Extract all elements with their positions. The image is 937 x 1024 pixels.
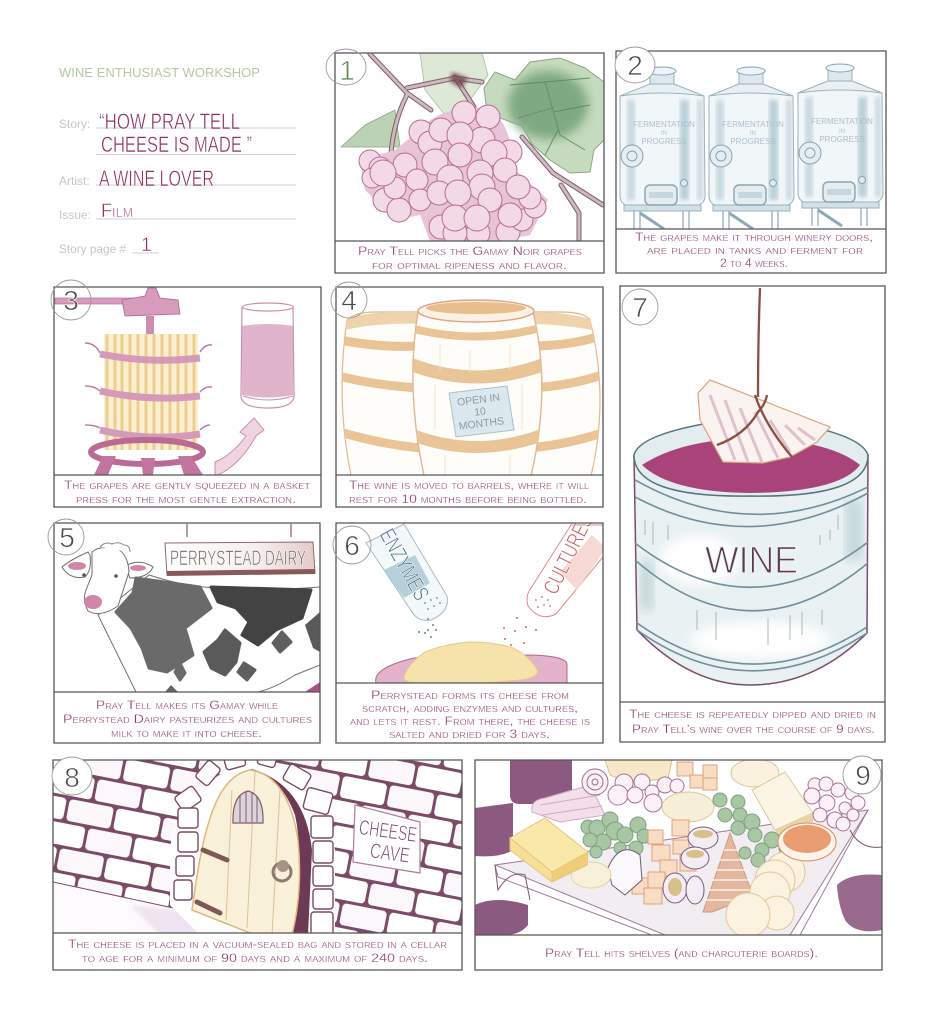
caption: are placed in tanks and ferment for — [647, 243, 863, 257]
walnuts — [571, 862, 611, 888]
illustration: three oak barrels and sign — [338, 300, 605, 480]
story field — [59, 109, 252, 157]
caption: The cheese is repeatedly dipped and dried in — [629, 707, 876, 721]
caption — [358, 244, 582, 272]
frame — [620, 286, 885, 742]
number badge 4: 4 — [341, 285, 357, 316]
caption: Perrystead forms its cheese from — [371, 688, 569, 702]
number badge 5 — [48, 519, 84, 555]
caption — [64, 478, 310, 506]
door shadow — [250, 769, 312, 935]
left barrel — [341, 311, 419, 474]
number badge 9 — [843, 756, 881, 794]
fig halves — [663, 827, 718, 904]
panel 5: dairy cow — [48, 519, 320, 743]
illustration: tub of wine with dipped cheese — [634, 288, 868, 685]
frame — [53, 760, 462, 970]
caption: scratch, adding enzymes and cultures, — [362, 701, 578, 715]
story field: Story: — [59, 117, 90, 131]
door — [192, 770, 300, 935]
story page number field: Story page # — [59, 242, 126, 256]
field lines — [96, 128, 296, 253]
number badge 2: 2 — [627, 50, 643, 81]
green grapes right — [713, 793, 793, 867]
sign: open in 10 months — [449, 386, 514, 437]
cow pink ears, muzzle — [68, 562, 320, 692]
caption: Pray Tell picks the Gamay Noir grapes — [358, 244, 582, 258]
floor — [53, 882, 295, 935]
frame — [336, 523, 603, 743]
caption — [629, 707, 876, 736]
salami roll — [582, 769, 608, 795]
number badge 1: 1 — [339, 55, 355, 86]
bowl back — [376, 655, 567, 683]
artist field: A WINE LOVER — [99, 166, 214, 191]
story field: CHEESE IS MADE ” — [101, 132, 252, 157]
frame — [336, 287, 603, 507]
cow outline — [62, 548, 320, 692]
sign: open in 10 months: 10 — [473, 405, 487, 419]
hanging sign: perrystead dairy — [165, 524, 315, 576]
caption — [349, 478, 590, 506]
number badge 8 — [52, 757, 92, 795]
illustration: three steel tanks: PROGRESS — [819, 135, 865, 144]
illustration: three steel tanks — [620, 64, 883, 229]
issue field — [59, 201, 133, 222]
cheese block — [510, 818, 588, 882]
green grapes left — [581, 812, 651, 858]
pink grapes right — [804, 777, 865, 831]
sign: cheese cave: CHEESE — [358, 816, 418, 847]
cultures shaker: CULTURES — [538, 510, 598, 598]
illustration: charcuterie board and wine — [475, 758, 882, 945]
sign: cheese cave — [353, 805, 420, 873]
caption: The cheese is placed in a vacuum-sealed bag and stored in a cellar — [68, 937, 447, 951]
number badge 7: 7 — [632, 292, 648, 323]
tub rim — [634, 417, 868, 496]
illustration: gamay noir grape cluster and leaves — [341, 53, 604, 245]
frame — [616, 51, 886, 273]
number badge 8: 8 — [64, 762, 80, 793]
number badge 6: 6 — [344, 530, 360, 561]
striped triangle cheese — [703, 833, 755, 912]
round brie — [662, 792, 714, 822]
tub body — [634, 455, 868, 685]
number badge 1 — [326, 49, 366, 86]
wine glasses — [475, 830, 882, 935]
number badge 6 — [333, 526, 371, 564]
caption: The wine is moved to barrels, where it will — [349, 478, 590, 492]
number badge 3: 3 — [63, 285, 79, 316]
illustration: three steel tanks: IN — [750, 131, 756, 137]
panel 6: enzymes and cultures — [333, 510, 612, 743]
caption — [68, 937, 447, 965]
caption: rest for 10 months before being bottled. — [349, 492, 587, 506]
tub bands — [635, 480, 868, 671]
title: wine enthusiast workshop: WINE ENTHUSIAST WORKSHOP — [59, 65, 260, 80]
basket bands — [85, 343, 212, 464]
number badge 2 — [615, 47, 655, 83]
frame — [335, 53, 604, 273]
right barrel — [534, 311, 601, 474]
caption: Perrystead Dairy pasteurizes and cultures — [63, 712, 312, 726]
string — [717, 288, 792, 457]
top cheese and cubes — [605, 760, 672, 781]
frame — [54, 523, 320, 743]
number badge 5: 5 — [59, 522, 75, 553]
caption: Pray Tell makes its Gamay while — [96, 698, 278, 712]
tub hatch marks — [645, 515, 838, 645]
basket staves — [104, 334, 198, 450]
falling specks — [418, 617, 537, 646]
issue field: Film — [101, 201, 133, 222]
orange cubes center — [632, 820, 696, 904]
story page number field — [59, 235, 152, 256]
enzymes shaker: ENZYMES — [375, 524, 434, 605]
frame — [54, 287, 321, 507]
caption: press for the most gentle extraction. — [76, 492, 296, 506]
brick wall — [53, 760, 462, 933]
number badge 3 — [51, 280, 91, 320]
artist field — [59, 166, 214, 191]
press screw and bar — [55, 288, 180, 336]
label: wine: WINE — [705, 540, 798, 582]
sign: open in 10 months: MONTHS — [458, 415, 505, 433]
door arch stones — [170, 752, 335, 936]
panel 9: charcuterie board — [475, 756, 882, 970]
arrow — [215, 418, 264, 475]
board — [495, 810, 868, 935]
panel 3: basket press — [51, 280, 321, 507]
frame — [475, 760, 882, 970]
cultures shaker — [526, 524, 602, 618]
wine bottles — [475, 758, 572, 945]
panel 2: fermentation tanks — [615, 47, 886, 273]
orange dip bowl — [778, 823, 836, 861]
panel 7: wine tub — [620, 286, 885, 742]
illustration: three steel tanks: IN — [839, 129, 845, 135]
issue field: Issue: — [59, 208, 91, 222]
number badge 7 — [622, 289, 658, 325]
workshop form header — [59, 65, 296, 256]
white grapes — [608, 774, 684, 812]
hanging sign: perrystead dairy: PERRYSTEAD DAIRY — [170, 547, 306, 570]
illustration: shakers, dough and bowl — [365, 524, 602, 682]
illustration: three steel tanks: FERMENTATION — [633, 120, 695, 129]
salami fan — [608, 850, 642, 895]
illustration: three steel tanks: FERMENTATION — [811, 117, 873, 126]
center barrel — [412, 299, 542, 474]
sign: cheese cave: CAVE — [368, 839, 411, 868]
illustration: three steel tanks: PROGRESS — [730, 137, 776, 146]
illustration: basket press, glass and arrow — [55, 288, 294, 475]
story page number field: 1 — [141, 235, 152, 256]
number badge 4 — [331, 282, 367, 318]
illustration: brick cellar and door — [53, 752, 462, 936]
caption: for optimal ripeness and flavor. — [372, 258, 567, 272]
caption: Pray Tell’s wine over the course of 9 days. — [632, 722, 875, 736]
caption — [350, 688, 590, 741]
artist field: Artist: — [59, 174, 90, 188]
crackers — [726, 852, 805, 937]
wedge of cheese — [698, 380, 830, 463]
sausages — [532, 785, 605, 822]
press legs — [94, 456, 203, 475]
panel 1: grapes — [326, 49, 604, 273]
glass of juice — [241, 303, 294, 408]
caption: salted and dried for 3 days. — [389, 727, 550, 741]
caption: Pray Tell hits shelves (and charcuterie boards). — [545, 946, 818, 960]
illustration: three steel tanks: PROGRESS — [641, 137, 687, 146]
wine surface — [642, 438, 860, 493]
bread and wedge — [731, 759, 813, 838]
caption: 2 to 4 weeks. — [720, 256, 788, 270]
illustration: three steel tanks: FERMENTATION — [722, 120, 784, 129]
caption — [63, 698, 312, 740]
caption: The grapes make it through winery doors, — [635, 230, 873, 244]
panel 4: barrels — [331, 282, 605, 507]
illustration: three steel tanks: IN — [661, 131, 667, 137]
cheese dough — [404, 642, 538, 684]
panel 8: cheese cave — [52, 752, 462, 970]
story field: “HOW PRAY TELL — [99, 109, 240, 134]
caption — [635, 230, 873, 270]
sign: open in 10 months: OPEN IN — [456, 392, 501, 409]
illustration: cow and dairy sign — [62, 524, 320, 692]
cow spots — [116, 578, 320, 692]
caption: The grapes are gently squeezed in a basket — [64, 478, 310, 492]
caption: to age for a minimum of 90 days and a maximum of 240 days. — [82, 951, 428, 965]
number badge 9: 9 — [855, 760, 871, 791]
cow hair and eyes — [100, 543, 130, 552]
caption: and lets it rest. From there, the cheese is — [350, 714, 590, 728]
caption: milk to make it into cheese. — [111, 726, 262, 740]
